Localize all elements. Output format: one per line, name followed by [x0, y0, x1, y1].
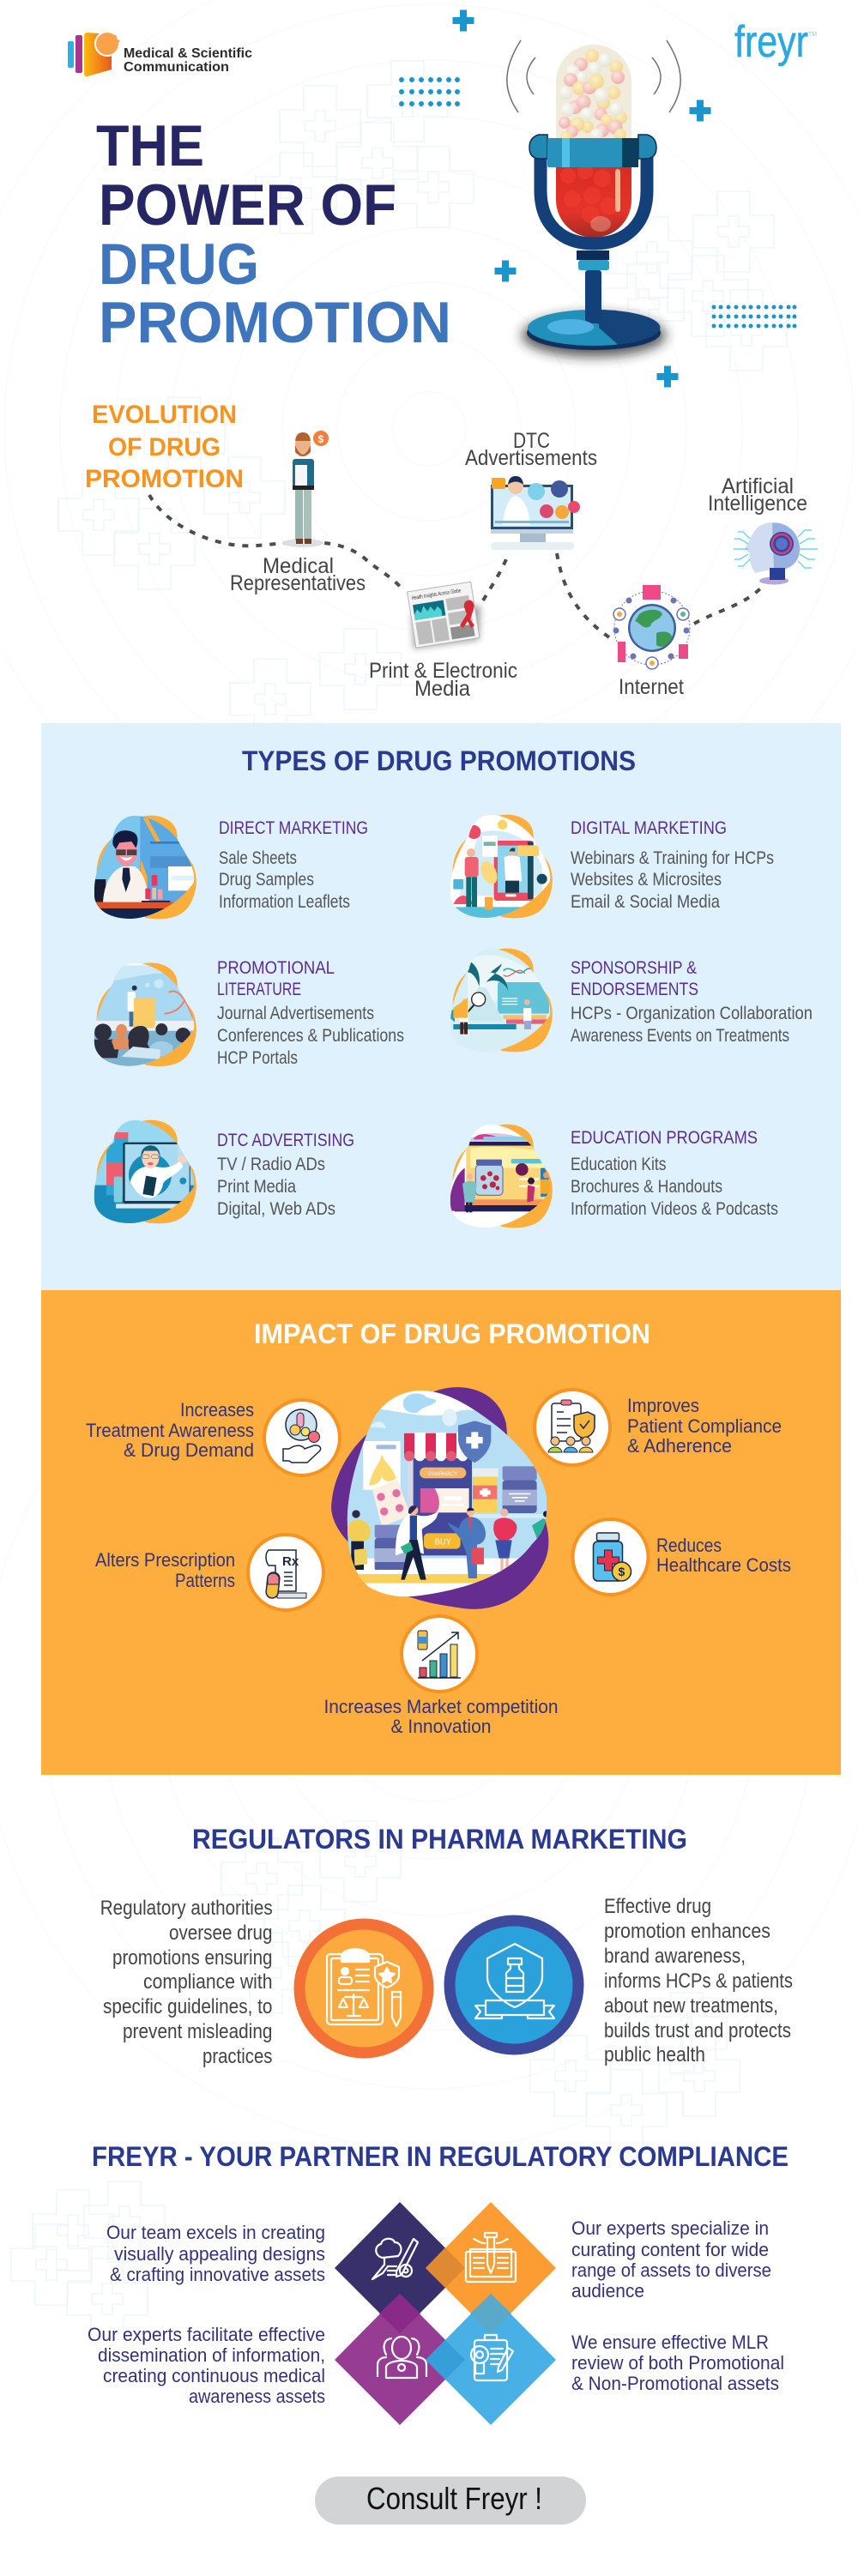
item: education programs: Education Kits	[571, 1155, 666, 1174]
heading: regulators in pharma marketing: REGULATORS IN PHARMA MARKETING	[192, 1824, 687, 1855]
label: internet: Internet	[619, 675, 684, 699]
icon: newspaper	[408, 582, 480, 649]
button: consult freyr	[315, 2476, 586, 2525]
label: print and electronic media: Print & Electronic	[369, 659, 517, 683]
impact labels: & Drug Demand	[124, 1439, 254, 1461]
icon: medical representative	[282, 431, 329, 547]
heading: IMPACT OF DRUG PROMOTION	[254, 1318, 650, 1349]
text: regulatory authorities: Regulatory authorities	[100, 1897, 273, 1920]
icon: improves patient compliance	[535, 1390, 610, 1465]
icon: internet globe	[613, 585, 690, 669]
text: effective drug promotion: Effective drug	[604, 1895, 711, 1918]
text: freyr left column: Our team excels in creating	[106, 2222, 325, 2243]
text: freyr left column: & crafting innovative assets	[110, 2264, 325, 2285]
text: effective drug promotion: about new treatments,	[604, 1994, 778, 2018]
decorative blue plus icons	[453, 10, 710, 388]
heading: evolution of drug promotion	[85, 401, 244, 493]
heading: evolution of drug promotion: EVOLUTION	[92, 401, 237, 429]
label: DTC advertisements	[465, 429, 597, 470]
icon: design	[372, 2239, 418, 2279]
collar	[547, 138, 638, 167]
capsule glass with pills	[556, 45, 631, 240]
pads	[529, 135, 547, 159]
label: artificial intelligence: Artificial	[722, 474, 794, 498]
impact labels: & Adherence	[627, 1435, 732, 1457]
text: freyr left column	[88, 2222, 325, 2407]
label: artificial intelligence	[708, 474, 807, 516]
icon: market competition	[402, 1616, 477, 1692]
text: freyr left column: Our experts facilitate effective	[88, 2324, 325, 2345]
text: effective drug promotion: informs HCPs & patients	[604, 1970, 793, 1993]
title: THE	[96, 113, 204, 178]
icon: artificial intelligence head	[734, 522, 818, 585]
text: freyr right column: range of assets to diverse	[571, 2259, 771, 2281]
impact labels: Patterns	[175, 1570, 235, 1591]
impact labels: Improves	[627, 1395, 699, 1416]
text: regulatory authorities	[100, 1897, 273, 2068]
impact labels: Patient Compliance	[627, 1415, 782, 1437]
illustration: pharmacy scene	[331, 1387, 549, 1609]
item: sponsorship and endorsements	[450, 949, 812, 1052]
illustration	[94, 962, 196, 1066]
text: effective drug promotion	[604, 1895, 793, 2066]
illustration	[450, 1124, 553, 1228]
heading: TYPES OF DRUG PROMOTIONS	[242, 745, 636, 776]
item: promotional literature: PROMOTIONAL	[217, 958, 335, 978]
item: promotional literature: HCP Portals	[217, 1048, 298, 1068]
text: effective drug promotion: brand awareness,	[604, 1945, 746, 1968]
label: artificial intelligence: Intelligence	[708, 492, 807, 516]
item: education programs: EDUCATION PROGRAMS	[571, 1128, 758, 1148]
item: direct marketing	[94, 815, 367, 920]
item: digital marketing: DIGITAL MARKETING	[571, 818, 727, 838]
item: direct marketing: Drug Samples	[219, 870, 314, 890]
text: freyr right column: audience	[571, 2280, 644, 2302]
text: regulatory authorities: practices	[202, 2045, 273, 2068]
illustration	[94, 1120, 196, 1223]
neck and connector	[577, 250, 609, 260]
label: print and electronic media: Media	[414, 677, 470, 701]
icon: increases treatment awareness	[264, 1400, 340, 1475]
logo: Medical and Scientific Communication: Communication	[124, 60, 229, 75]
item: DTC advertising: Digital, Web ADs	[217, 1199, 335, 1219]
impact labels: Treatment Awareness	[86, 1420, 254, 1441]
item: direct marketing: DIRECT MARKETING	[219, 818, 368, 838]
button: consult freyr: Consult Freyr !	[366, 2481, 542, 2516]
item: education programs: Brochures & Handouts	[571, 1177, 722, 1197]
icon: newspaper: Health Insights Across Globe	[411, 588, 462, 601]
label: medical representatives	[230, 554, 366, 595]
text: freyr right column: & Non-Promotional assets	[571, 2373, 779, 2394]
item: promotional literature: Journal Advertisements	[217, 1004, 374, 1023]
title: PROMOTION	[99, 290, 451, 355]
text: freyr right column	[571, 2217, 784, 2394]
illustration: pharmacy scene: PHARMACY	[428, 1471, 458, 1477]
heading: evolution of drug promotion: OF DRUG	[108, 433, 221, 462]
text: freyr left column: awareness assets	[189, 2386, 325, 2407]
icon: alters prescription patterns	[248, 1535, 323, 1610]
item: DTC advertising: DTC ADVERTISING	[217, 1131, 354, 1150]
item: DTC advertising: Print Media	[217, 1177, 296, 1197]
item: promotional literature	[94, 961, 403, 1066]
label: medical representatives: Medical	[263, 554, 334, 578]
text: freyr left column: dissemination of information,	[98, 2344, 325, 2366]
logo: freyr: TM	[808, 32, 817, 38]
text: freyr right column: Our experts specialize in	[571, 2217, 769, 2239]
label: DTC advertisements: Advertisements	[465, 446, 597, 470]
impact labels: & Innovation	[391, 1716, 491, 1737]
text: regulatory authorities: specific guidelines, to	[103, 1995, 273, 2018]
item: digital marketing: Email & Social Media	[571, 892, 720, 912]
impact labels	[86, 1395, 791, 1737]
text: freyr right column: curating content for wide	[571, 2239, 769, 2260]
title: POWER OF	[99, 172, 396, 238]
icon: medical representative: $	[317, 433, 324, 445]
holder	[541, 157, 647, 244]
panel: impact of drug promotion	[41, 1290, 841, 1775]
impact labels: Alters Prescription	[95, 1549, 235, 1571]
icon: content	[466, 2233, 516, 2282]
panel: types of drug promotions	[41, 723, 841, 1290]
logo: Medical and Scientific Communication	[68, 32, 252, 76]
label: medical representatives: Representatives	[230, 571, 366, 595]
illustration	[450, 949, 553, 1052]
item: direct marketing: Information Leaflets	[219, 892, 350, 912]
text: effective drug promotion: promotion enhances	[604, 1920, 770, 1943]
text: regulatory authorities: promotions ensuring	[112, 1946, 273, 1970]
text: effective drug promotion: builds trust and protects	[604, 2019, 791, 2042]
text: freyr right column: We ensure effective MLR	[571, 2332, 769, 2353]
text: freyr left column: creating continuous medical	[103, 2365, 325, 2386]
icon: reduces healthcare costs	[573, 1519, 649, 1595]
text: freyr right column: review of both Promotional	[571, 2352, 784, 2374]
heading: evolution of drug promotion: PROMOTION	[85, 465, 244, 493]
sound waves	[507, 40, 680, 112]
impact labels: Healthcare Costs	[656, 1554, 791, 1576]
icon: DTC computer	[491, 476, 580, 550]
stem	[585, 270, 601, 323]
dot grid top	[399, 77, 460, 106]
icon: review	[471, 2335, 513, 2380]
item: education programs	[450, 1124, 777, 1228]
icon: capsule microphone	[507, 40, 680, 357]
text: regulatory authorities: compliance with	[143, 1970, 273, 1994]
label: DTC advertisements: DTC	[513, 429, 550, 453]
text: regulatory authorities: oversee drug	[169, 1921, 273, 1945]
heading: freyr partner: FREYR - YOUR PARTNER IN REGULATORY COMPLIANCE	[92, 2141, 789, 2172]
item: sponsorship and endorsements: ENDORSEMENTS	[571, 980, 698, 999]
item: sponsorship and endorsements: Awareness Events on Treatments	[571, 1026, 789, 1046]
item: promotional literature: Conferences & Publications	[217, 1026, 404, 1046]
item: direct marketing: Sale Sheets	[219, 848, 297, 868]
icon: blue shield circle	[450, 1921, 578, 2049]
base	[527, 316, 661, 350]
item: DTC advertising: TV / Radio ADs	[217, 1155, 325, 1174]
logo: freyr: freyr	[734, 17, 808, 67]
title	[96, 113, 451, 355]
impact labels: Reduces	[656, 1535, 722, 1556]
illustration	[94, 815, 196, 920]
label: print and electronic media	[369, 659, 517, 701]
icon: reduces healthcare costs: $	[618, 1565, 625, 1578]
illustration	[450, 815, 553, 918]
text: effective drug promotion: public health	[604, 2043, 705, 2066]
text: freyr left column: visually appealing designs	[114, 2243, 325, 2265]
title: DRUG	[99, 232, 259, 297]
item: DTC advertising	[94, 1120, 353, 1223]
item: education programs: Information Videos & Podcasts	[571, 1199, 778, 1219]
item: sponsorship and endorsements: HCPs - Organization Collaboration	[571, 1004, 813, 1023]
dotted timeline	[149, 495, 763, 639]
illustration: pharmacy scene: BUY	[435, 1538, 451, 1547]
icon: people	[378, 2337, 426, 2378]
item: sponsorship and endorsements: SPONSORSHIP &	[571, 958, 697, 978]
item: digital marketing	[450, 815, 774, 918]
icon: orange regulatory circle	[299, 1924, 428, 2053]
text: regulatory authorities: prevent misleading	[123, 2020, 273, 2043]
icon: alters prescription patterns: Rx	[282, 1554, 299, 1569]
logo: Medical and Scientific Communication: Medical & Scientific	[124, 46, 252, 61]
dot grid lower	[712, 305, 796, 328]
impact labels: Increases	[180, 1399, 254, 1421]
impact labels: Increases Market competition	[324, 1696, 558, 1717]
item: digital marketing: Webinars & Training for HCPs	[571, 848, 774, 868]
item: digital marketing: Websites & Microsites	[571, 870, 722, 890]
diamonds with icons	[335, 2202, 556, 2425]
base shadow	[522, 314, 666, 357]
item: promotional literature: LITERATURE	[217, 980, 301, 999]
